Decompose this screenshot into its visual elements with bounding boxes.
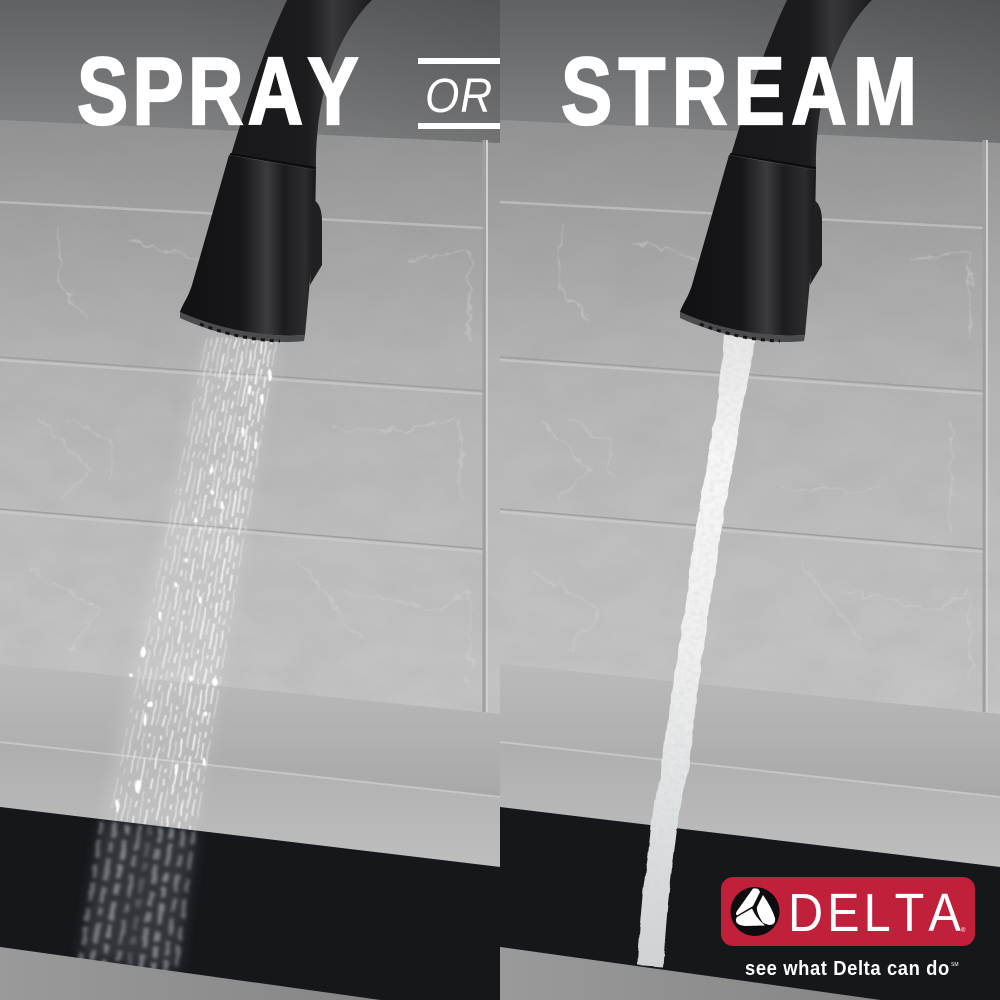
faucet neck bbox=[731, 0, 872, 170]
heading: OR with rules bbox=[418, 58, 500, 129]
heading: STREAM: STREAM bbox=[561, 38, 917, 145]
lower counter surface bbox=[500, 947, 880, 1000]
top backdrop band bbox=[500, 0, 1000, 134]
nozzle rim bbox=[180, 312, 305, 342]
nozzle rim bbox=[680, 312, 805, 342]
black cabinet bbox=[0, 807, 500, 1000]
logo badge bbox=[721, 877, 975, 946]
spray droplets on dark cabinet bbox=[80, 820, 197, 980]
black cabinet bbox=[500, 807, 1000, 1000]
faucet: spray side bbox=[180, 0, 372, 342]
stream of water bbox=[637, 335, 756, 967]
sink basin bbox=[500, 670, 1000, 796]
icon: Delta emblem bbox=[730, 887, 780, 936]
side button bbox=[810, 200, 822, 285]
countertop edge bbox=[0, 742, 500, 867]
spray water bbox=[80, 335, 280, 980]
faucet: stream side bbox=[680, 0, 872, 342]
Delta logo bbox=[721, 877, 975, 946]
panel: stream scene bbox=[500, 0, 1000, 1000]
faucet neck bbox=[231, 0, 372, 170]
bright droplets bbox=[115, 369, 272, 813]
service mark: SM bbox=[951, 962, 958, 968]
countertop edge bbox=[500, 742, 1000, 867]
lower counter surface bbox=[0, 947, 380, 1000]
registered mark: ® bbox=[961, 927, 966, 934]
heading: SPRAY: SPRAY bbox=[77, 38, 359, 145]
sink basin bbox=[0, 670, 500, 796]
top backdrop band bbox=[0, 0, 500, 134]
logo wordmark: DELTA bbox=[788, 882, 961, 943]
tagline: see what Delta can do bbox=[745, 958, 949, 980]
faucet spray head bbox=[680, 155, 816, 336]
concrete tile wall bbox=[0, 120, 500, 760]
panel: spray scene bbox=[0, 0, 500, 1000]
side button bbox=[310, 200, 322, 285]
heading: OR with rules: OR bbox=[425, 68, 492, 122]
concrete tile wall bbox=[500, 120, 1000, 760]
faucet spray head bbox=[180, 155, 316, 336]
